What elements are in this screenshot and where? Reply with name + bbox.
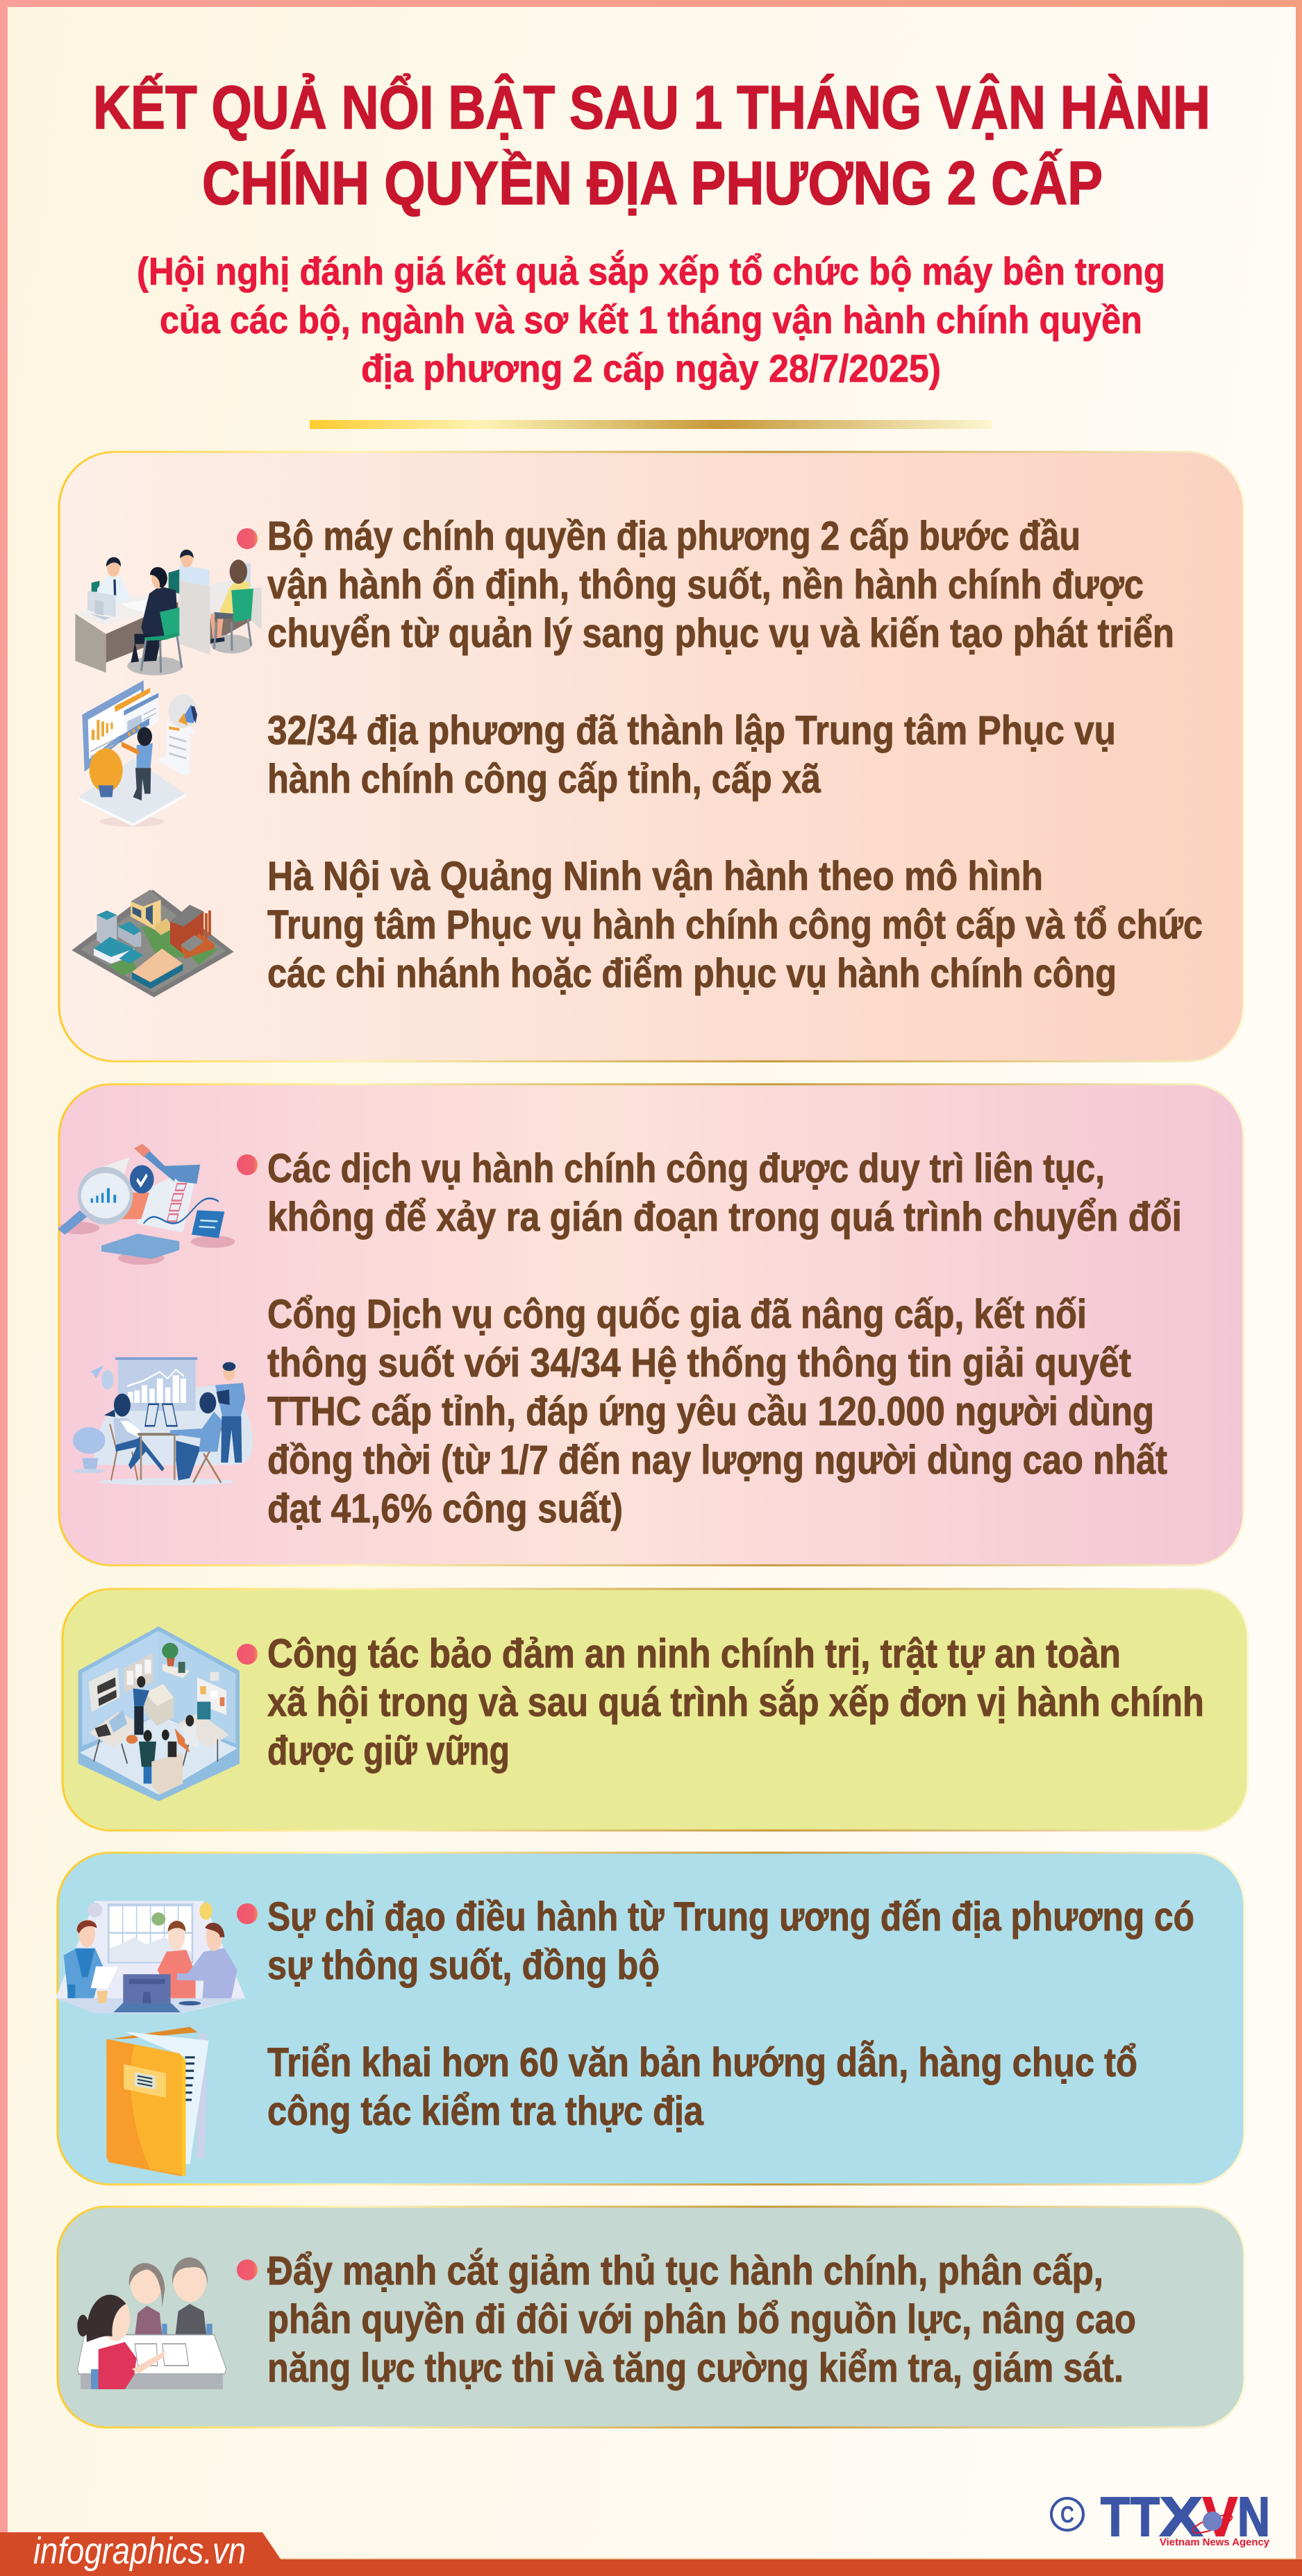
logo: TTXVN Vietnam News Agency: C (1060, 2502, 1074, 2528)
subtitle: địa phương 2 cấp ngày 28/7/2025) (361, 346, 941, 390)
logo: TTXVN Vietnam News Agency: N (1237, 2486, 1270, 2548)
text: apparatus stable: chuyển từ quản lý sang phục vụ và kiến tạo phát triển (267, 611, 1174, 656)
panel 2: public services (58, 1084, 1244, 1565)
logo: TTXVN Vietnam News Agency: T (1101, 2486, 1130, 2548)
icon: team around a computer (56, 1901, 245, 2014)
icon: clerk helping elderly couple (77, 2257, 226, 2389)
text: 60 guidance documents: công tác kiểm tra thực địa (267, 2089, 704, 2134)
icon: orange folder (106, 2027, 209, 2176)
text: apparatus stable: vận hành ổn định, thông suốt, nền hành chính được (267, 562, 1144, 607)
text: national portal: thông suốt với 34/34 Hệ thống thông tin giải quyết (267, 1340, 1131, 1386)
text: apparatus stable (267, 514, 1174, 656)
icon: meeting with chart (73, 1357, 253, 1485)
text: continuous services (267, 1146, 1182, 1240)
panel 4: direction and guidance (56, 1853, 1244, 2184)
text: reduce procedures: Đẩy mạnh cắt giảm thủ tục hành chính, phân cấp, (267, 2248, 1103, 2293)
text: apparatus stable: Bộ máy chính quyền địa phương 2 cấp bước đầu (267, 514, 1080, 559)
icon: office service desk (75, 549, 262, 675)
panel 5: procedure reduction (58, 2207, 1244, 2427)
text: security maintained: Công tác bảo đảm an ninh chính trị, trật tự an toàn (267, 1631, 1121, 1676)
text: continuous services: Các dịch vụ hành chính công được duy trì liên tục, (267, 1146, 1105, 1191)
text: 60 guidance documents: Triển khai hơn 60 văn bản hướng dẫn, hàng chục tổ (267, 2040, 1137, 2085)
text: reduce procedures: phân quyền đi đôi với phân bổ nguồn lực, nâng cao (267, 2297, 1136, 2342)
text: 32/34 localities: 32/34 địa phương đã thành lập Trung tâm Phục vụ (267, 708, 1116, 753)
logo: TTXVN Vietnam News Agency: Vietnam News Agency (1160, 2536, 1270, 2548)
text: Hanoi and Quang Ninh (267, 854, 1203, 996)
text: national portal: TTHC cấp tỉnh, đáp ứng yêu cầu 120.000 người dùng (267, 1389, 1154, 1434)
text: Hanoi and Quang Ninh: Hà Nội và Quảng Ninh vận hành theo mô hình (267, 854, 1043, 899)
icon: person at dashboard with light bulb (78, 680, 197, 827)
text: 32/34 localities (267, 708, 1116, 802)
icon: documents and magnifier (58, 1144, 235, 1265)
text: national portal: đồng thời (từ 1/7 đến nay lượng người dùng cao nhất (267, 1438, 1167, 1483)
footer bar (0, 2530, 1302, 2576)
logo: TTXVN Vietnam News Agency (1051, 2486, 1270, 2548)
text: consistent direction (267, 1894, 1194, 1988)
text: consistent direction: sự thông suốt, đồng bộ (267, 1943, 660, 1988)
text: Hanoi and Quang Ninh: các chi nhánh hoặc điểm phục vụ hành chính công (267, 951, 1117, 996)
text: national portal: Cổng Dịch vụ công quốc gia đã nâng cấp, kết nối (267, 1292, 1087, 1337)
logo: TTXVN Vietnam News Agency: X (1160, 2486, 1203, 2548)
text: national portal: đạt 41,6% công suất) (267, 1486, 623, 1531)
text: 32/34 localities: hành chính công cấp tỉnh, cấp xã (267, 757, 821, 802)
source label: infographics.vn (33, 2530, 246, 2572)
bullet (237, 1903, 258, 1924)
title (93, 73, 1210, 217)
icon: isometric office room (78, 1626, 240, 1801)
panel 3: security (62, 1589, 1248, 1830)
logo: TTXVN Vietnam News Agency: T (1130, 2486, 1160, 2548)
text: security maintained: được giữ vững (267, 1728, 510, 1774)
text: reduce procedures: năng lực thực thi và tăng cường kiểm tra, giám sát. (267, 2346, 1124, 2391)
subtitle (137, 249, 1165, 390)
bullet (237, 1154, 258, 1175)
subtitle: của các bộ, ngành và sơ kết 1 tháng vận hành chính quyền (160, 298, 1142, 342)
bullet (237, 528, 258, 549)
bullet (237, 1644, 258, 1665)
title: CHÍNH QUYỀN ĐỊA PHƯƠNG 2 CẤP (202, 149, 1103, 217)
subtitle: (Hội nghị đánh giá kết quả sắp xếp tổ chức bộ máy bên trong (137, 249, 1165, 293)
bullet (237, 2259, 258, 2280)
icon: isometric city block (72, 890, 234, 997)
text: reduce procedures (267, 2248, 1136, 2391)
panel 1: administrative apparatus (59, 452, 1244, 1061)
text: national portal (267, 1292, 1167, 1531)
text: continuous services: không để xảy ra gián đoạn trong quá trình chuyển đổi (267, 1195, 1182, 1240)
gold divider bar (310, 420, 992, 429)
logo: TTXVN Vietnam News Agency: V (1203, 2486, 1237, 2548)
text: 60 guidance documents (267, 2040, 1137, 2134)
text: security maintained (267, 1631, 1204, 1774)
